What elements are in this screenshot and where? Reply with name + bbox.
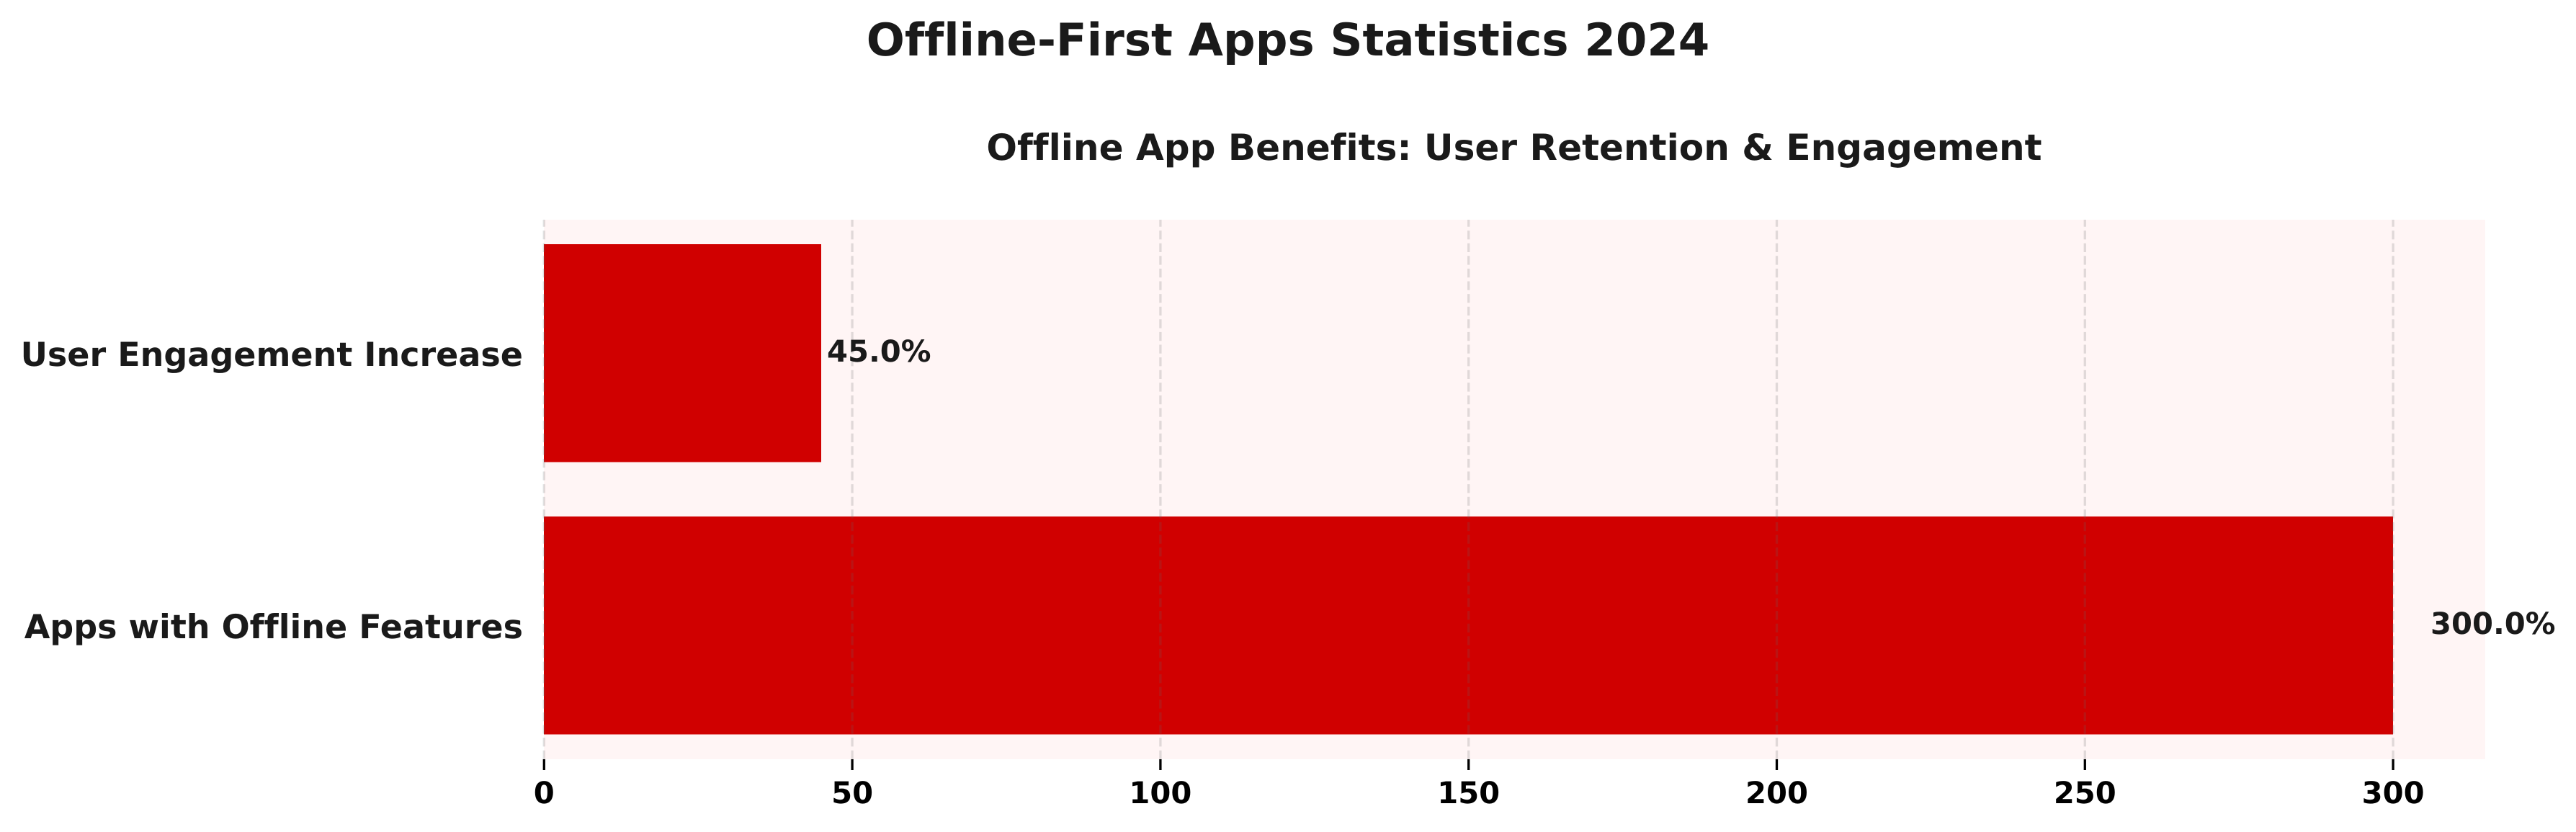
x axis tick labels [534, 775, 2425, 810]
x axis tick labels: 150 [1437, 775, 1500, 810]
bar value labels [827, 334, 2556, 641]
x axis tick labels: 250 [2054, 775, 2116, 810]
y axis category labels: User Engagement Increase [21, 335, 523, 374]
x axis tick labels: 300 [2362, 775, 2425, 810]
y axis category labels: Apps with Offline Features [24, 607, 523, 646]
bar: Apps with Offline Features [544, 516, 2393, 735]
bar: User Engagement Increase [544, 244, 821, 462]
title: Offline-First Apps Statistics 2024 [867, 14, 1709, 66]
bar value labels: 300.0% [2430, 606, 2556, 641]
y axis category labels [21, 335, 523, 646]
bar value labels: 45.0% [827, 334, 931, 369]
x axis tick labels: 50 [831, 775, 873, 810]
x axis tick labels: 200 [1745, 775, 1808, 810]
x axis ticks [544, 759, 2393, 770]
bar chart [21, 220, 2556, 810]
x axis tick labels: 0 [534, 775, 555, 810]
plot area background [544, 220, 2485, 759]
x axis tick labels: 100 [1129, 775, 1191, 810]
chart heading: Offline App Benefits: User Retention & Engagement [986, 126, 2042, 169]
